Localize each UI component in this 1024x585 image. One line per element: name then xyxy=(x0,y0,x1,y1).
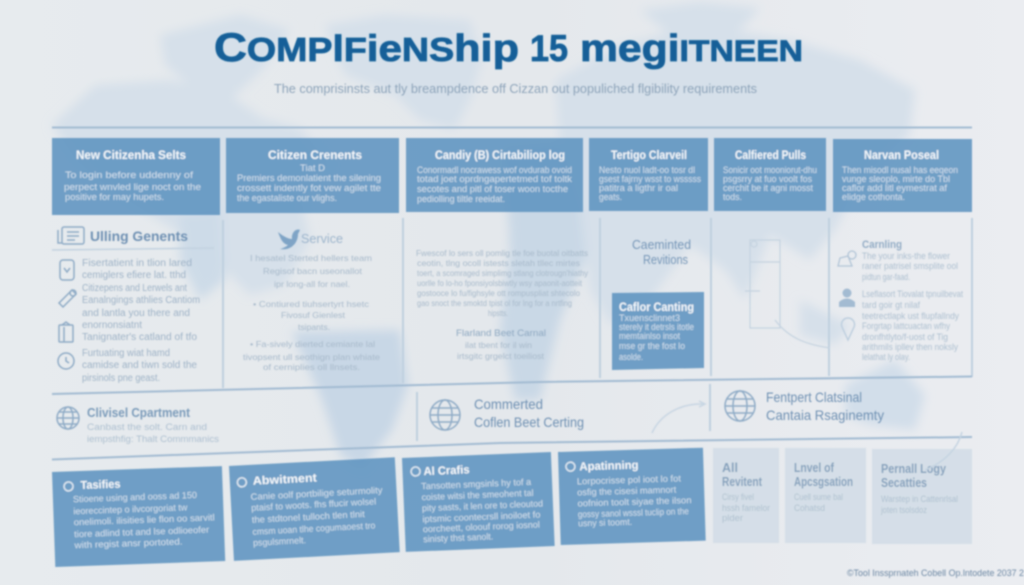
header card: Narvan Poseal xyxy=(833,139,972,212)
icon: document xyxy=(58,227,84,244)
header card: Narvan Poseal: Then misodl nusal has eeqeon xyxy=(842,165,958,175)
callout: Caflor Canting: memtainlso insot xyxy=(619,331,680,341)
world map watermark xyxy=(52,2,925,468)
header card: Tertigo Clarveil: Nesto nuol ladt-oo tosr dl xyxy=(599,165,695,175)
bottom card: Abwitment: ptaisf to woots. fhs ffucir wolsel xyxy=(251,496,376,513)
panel: centre text column: hipstts. xyxy=(488,308,508,318)
panel: centre text column: uorlle fo lo-ho fponsiyolsbiwtly wsy apaonit-aotteit xyxy=(417,278,583,288)
bottom card: Al Crafis xyxy=(402,452,555,552)
panel: Service: Fivosuf Gienlest xyxy=(281,310,346,320)
band item: Clivisel Cpartment: Clivisel Cpartment xyxy=(87,406,191,420)
panel: centre text column: Flarland Beet Carnal xyxy=(456,328,546,339)
light card: Lnvel of Apcsgsation: Cohatsd xyxy=(794,503,825,513)
bottom card: Apatinning: osfig the cisesi mamnort xyxy=(577,484,677,497)
header card: Candiy Cirtabiliop log: pediolling tiltle reeidat. xyxy=(417,194,505,204)
bottom card: Apatinning: usny si toomt. xyxy=(578,517,632,528)
icon: cloud person xyxy=(838,251,856,266)
panel: Carnling: dronfhtlyto/f-uost of Tig xyxy=(862,332,948,342)
icon: bird xyxy=(278,230,300,249)
panel: Carnling: Lseflasort Tiovalat tpnuilbevat xyxy=(862,289,963,299)
bottom card: Abwitment xyxy=(229,457,400,561)
light card: All Revitent: All xyxy=(722,460,738,475)
band item: Clivisel Cpartment xyxy=(57,406,220,444)
panel: Carnling: arithmils ipllev then noksly xyxy=(862,342,958,352)
panel: Ulling Genents: Ulling Genents xyxy=(90,228,188,244)
bottom card: Al Crafis: oorcheett, oloouf rorog iosnol xyxy=(423,520,540,534)
icon: phone xyxy=(60,260,74,280)
callout: Caflor Canting xyxy=(612,292,704,370)
band item: Fentpert Clatsinal: Fentpert Clatsinal xyxy=(766,389,862,405)
light card: Pernall Logy Secatties: joten tsolsdoz xyxy=(880,505,927,515)
header card: Citizen Crenents: crossett indently fot vew agilet tte xyxy=(237,183,381,193)
header card: Tertigo Clarveil: geats. xyxy=(599,192,622,202)
callout: Caflor Canting: Txuensclinnet3 xyxy=(619,313,680,323)
bottom card: Tasifies xyxy=(52,466,225,567)
panel: Service xyxy=(243,230,380,372)
header card: Calfiered Pulls: Calfiered Pulls xyxy=(735,150,806,162)
bottom card: Abwitment: cmsm uoan tlhe cogumaoest tro xyxy=(252,520,376,537)
band item: Commerted Coflen Beet Certing xyxy=(430,396,584,430)
header card: Narvan Poseal: caflor add litl eymestrat af xyxy=(842,183,948,193)
icon: globe xyxy=(57,407,79,429)
header card: Tertigo Clarveil: Tertigo Clarveil xyxy=(611,150,687,162)
light card: Lnvel of Apcsgsation: Apcsgsation xyxy=(794,474,853,489)
panel: Caeminted Revitions: Caeminted xyxy=(632,237,691,252)
header card: Calfiered Pulls: psgsrry at fuo voolt fos xyxy=(723,174,812,184)
header card: Calfiered Pulls: cerchit be it agni mosst xyxy=(723,183,813,193)
bottom card: Abwitment: psgulsmrnelt. xyxy=(253,535,306,548)
panel: Service: • Fa-sively dierted cemiante lal xyxy=(250,339,375,349)
icon: clipboard xyxy=(59,322,73,342)
light card: Pernall Logy Secatties xyxy=(872,449,972,544)
panel: Ulling Genents: Fisertatient in tlion lared xyxy=(82,258,192,269)
panel: Caeminted Revitions: Revitions xyxy=(643,252,688,267)
panel: Service: tivopsent ull seothign plan whiate xyxy=(243,352,380,362)
bottom card: Abwitment: the stdtonel tulloch tlen tlnit xyxy=(252,509,365,525)
bottom card: Tasifies: tiore adlind tot and lse odlioeofer xyxy=(74,525,209,539)
header card: Narvan Poseal: Narvan Poseal xyxy=(864,150,939,162)
bottom card: Tasifies: ieoreccintep o ilvcorgoriat tw xyxy=(73,502,188,516)
header card: Candiy Cirtabiliop log: secotes and pitl of toser woon tocthe xyxy=(417,184,568,194)
panel: Ulling Genents: cemiglers efiere lat. tthd xyxy=(82,270,186,281)
bottom card: Al Crafis: sinisty thst sanolt. xyxy=(423,531,493,544)
header card: New Citizenha Selts: New Citizenha Selts xyxy=(76,150,186,162)
callout: Caflor Canting: sterely it detrsls itotle xyxy=(619,322,694,332)
band item: Fentpert Clatsinal xyxy=(725,389,884,423)
panel: Carnling: tard goir gt nilaf xyxy=(862,300,920,310)
panel: Ulling Genents: Tanignater's catland of tfo xyxy=(82,332,197,343)
header card: New Citizenha Selts: To login before uddenny of xyxy=(65,170,194,180)
light card: All Revitent xyxy=(713,448,779,543)
panel: centre text column xyxy=(416,248,589,361)
light card: Lnvel of Apcsgsation: Cuell sume bal xyxy=(794,492,843,502)
panel: Carnling: Forgrtap lattcuactan wfhy xyxy=(862,321,950,331)
panel: Service: of cerniplies oll llnsets. xyxy=(263,362,360,372)
bottom card: Apatinning: Lorpocrisse pol ioot lo fot xyxy=(577,473,681,486)
panel: regional map frame xyxy=(745,240,830,348)
bottom card: Al Crafis: coiste witsi the smeohent tal xyxy=(421,488,534,502)
panel: Carnling: lelathat ly olay. xyxy=(862,352,910,362)
icon: globe xyxy=(430,400,460,430)
panel: centre text column: ilat tbent for il win xyxy=(465,340,532,350)
light card: Pernall Logy Secatties: Secatties xyxy=(881,475,927,490)
bottom card: Apatinning xyxy=(558,448,706,545)
callout: Caflor Canting: Caflor Canting xyxy=(619,302,694,314)
header card: Candiy Cirtabiliop log: totad joet oprdngapertetmed tof toltk xyxy=(417,174,573,184)
arrow: corner swoosh xyxy=(925,432,962,470)
title xyxy=(214,26,803,70)
title: 15 xyxy=(530,28,568,69)
panel: centre text column: Fwescof lo sers oll pomlig tle foe buotal oitbatts xyxy=(416,248,588,258)
header card: Calfiered Pulls: Sonicir oot mooniorut-dhu xyxy=(723,165,817,175)
panel: Ulling Genents: Furtuating wiat hamd xyxy=(82,348,170,359)
panel: Carnling: The your inks-the flower xyxy=(862,251,950,261)
panel: Service: I hesatel Sterted hellers team xyxy=(250,253,372,263)
panel: centre text column: gostooce lo fu/fighsyle ott rompuspliat shtecolo xyxy=(417,288,580,298)
panel: Ulling Genents: Citizepens and Lerwels ant xyxy=(82,283,187,294)
light card: Pernall Logy Secatties: Pernall Logy xyxy=(881,461,947,476)
header card: Citizen Crenents: Tiat D xyxy=(300,163,326,173)
panel: Service: ipr long-all for nael. xyxy=(274,279,350,289)
bottom card: Al Crafis: pity sasts, it len ore to cleoutod xyxy=(422,498,543,513)
panel: Ulling Genents: and lantla you there and xyxy=(82,308,190,319)
bottom card: Tasifies: with regist ansr portoted. xyxy=(73,536,183,550)
panel: Ulling Genents xyxy=(52,227,214,384)
bottom card: Abwitment: Abwitment xyxy=(253,472,317,488)
panel: Ulling Genents: camidse and tiwn sold the xyxy=(82,360,197,371)
panel: Ulling Genents: Eanalngings athlies Cantiom xyxy=(82,295,200,306)
band item: Fentpert Clatsinal: Cantaia Rsaginemty xyxy=(766,407,884,423)
panel: centre text column: ceotin, tlng ocoll istests sletah tllec mirtes xyxy=(417,258,580,268)
header card: Narvan Poseal: elidge cothonta. xyxy=(842,192,905,202)
header card: Candiy Cirtabiliop log: Conormadl nocrawess wof ovdurab ovoid xyxy=(417,165,572,175)
header card: New Citizenha Selts: positive for may hupets. xyxy=(65,192,164,202)
bottom card: Apatinning: gossy sanol wsssl tuclip on the xyxy=(578,506,689,519)
light card: Lnvel of Apcsgsation: Lnvel of xyxy=(794,460,835,475)
panel: Ulling Genents: pirsinols pne geast. xyxy=(82,373,160,384)
header card: New Citizenha Selts xyxy=(52,138,220,215)
icon: person xyxy=(839,288,855,307)
bottom card: Tasifies: onelimoli. ilisities lie flon oo sarvitl xyxy=(74,512,215,527)
panel: Caeminted Revitions xyxy=(612,237,704,370)
header card: Calfiered Pulls: tods. xyxy=(723,192,742,202)
band item: Commerted Coflen Beet Certing: Coflen Beet Certing xyxy=(474,414,584,430)
panel: centre text column: irtsgitc grgelct toeiliost xyxy=(457,351,545,361)
header card: New Citizenha Selts: perpect wnvled lige noct on the xyxy=(64,182,201,192)
icon: location pin xyxy=(842,318,854,340)
header card: Calfiered Pulls xyxy=(714,138,826,211)
band item: Commerted Coflen Beet Certing: Commerted xyxy=(474,396,543,412)
panel: Carnling: Carnling xyxy=(862,239,902,251)
header card: Citizen Crenents xyxy=(226,138,399,213)
panel: centre text column: gao snoct the smoktd tpist ol for lng for a nrtfing xyxy=(417,298,572,308)
header card: Citizen Crenents: the egastaliste our vlighs. xyxy=(237,193,337,203)
title: COMP lFieNShip xyxy=(214,26,519,70)
bottom card: Al Crafis: iptsmic coontecrsll inoiloet fo xyxy=(422,509,541,524)
subtitle: The comprisinsts aut tly breampdence off Cizzan out populiched flgibility requirements xyxy=(274,81,757,96)
callout: Caflor Canting: asolde. xyxy=(619,352,643,362)
light card: All Revitent: hssh famelor xyxy=(722,503,770,513)
panel: Carnling: teetrectlapk ust flupfallndy xyxy=(862,311,959,321)
light card: All Revitent: Revitent xyxy=(722,474,763,489)
panel: Service: tsipants. xyxy=(298,322,330,332)
light card: Pernall Logy Secatties: Warstep in Cattenrlsal xyxy=(881,494,958,504)
panel: Service: Service xyxy=(301,232,343,246)
panel: Service: • Contiured tiuhsertyrt hsetc xyxy=(253,299,370,309)
header card: Citizen Crenents: Citizen Crenents xyxy=(268,150,362,162)
bottom card: Al Crafis: Tansotten smgsinls hy tof a xyxy=(421,477,531,491)
header card: Tertigo Clarveil: gsest fajrny wsst to wsssss xyxy=(599,174,701,184)
bottom card: Tasifies: Stioene using and ooss ad 150 xyxy=(73,490,197,504)
header card: Tertigo Clarveil: patitra a ligthr ir oal xyxy=(599,183,678,193)
header card: Candiy Cirtabiliop log xyxy=(406,138,583,212)
icon: clock xyxy=(58,353,74,369)
panel: Carnling xyxy=(838,239,963,362)
header card: Narvan Poseal: vunge sleoplo, mirte do Tbl xyxy=(842,174,950,184)
light card: All Revitent: Cirsy fivel xyxy=(722,492,754,502)
header card: Tertigo Clarveil xyxy=(589,138,708,211)
panel: Carnling: raner patrisel smsplite ool xyxy=(862,261,958,271)
light card: All Revitent: plder xyxy=(722,513,743,523)
icon: pencil xyxy=(59,290,76,307)
bottom card: Abwitment: Canie oolf portbilige seturmolity xyxy=(250,485,383,502)
callout: Caflor Canting: mse gr the fost lo xyxy=(619,341,685,351)
icon: globe xyxy=(725,391,755,421)
bottom card: Al Crafis: Al Crafis xyxy=(423,464,470,478)
bottom card: Tasifies: Tasifies xyxy=(80,479,121,492)
bottom card: Apatinning: oofnion toolt siyae the ilson xyxy=(577,495,692,508)
header card: Candiy Cirtabiliop log: Candiy (B) Cirtabiliop log xyxy=(435,150,565,162)
panel: Ulling Genents: enornonsiatnt xyxy=(82,320,142,331)
bottom card: Apatinning: Apatinning xyxy=(579,460,639,473)
panel: Carnling: pidtun gar-faad. xyxy=(862,272,910,282)
arrow: curved connector xyxy=(652,401,705,433)
light card: Lnvel of Apcsgsation xyxy=(785,448,866,543)
panel: Service: Regisof bacn useonallot xyxy=(263,266,363,276)
band item: Clivisel Cpartment: Canbast the solt. Carn and xyxy=(87,422,207,432)
title: megi ITNEEN xyxy=(580,28,803,70)
header card: Citizen Crenents: Premiers demonlatient the silening xyxy=(237,173,381,183)
band item: Clivisel Cpartment: iempsthfig: Thalt Commmanics xyxy=(87,434,220,444)
panel: centre text column: toert, a scomraged simplimg stlang clotrougn'hiathy xyxy=(417,268,589,278)
